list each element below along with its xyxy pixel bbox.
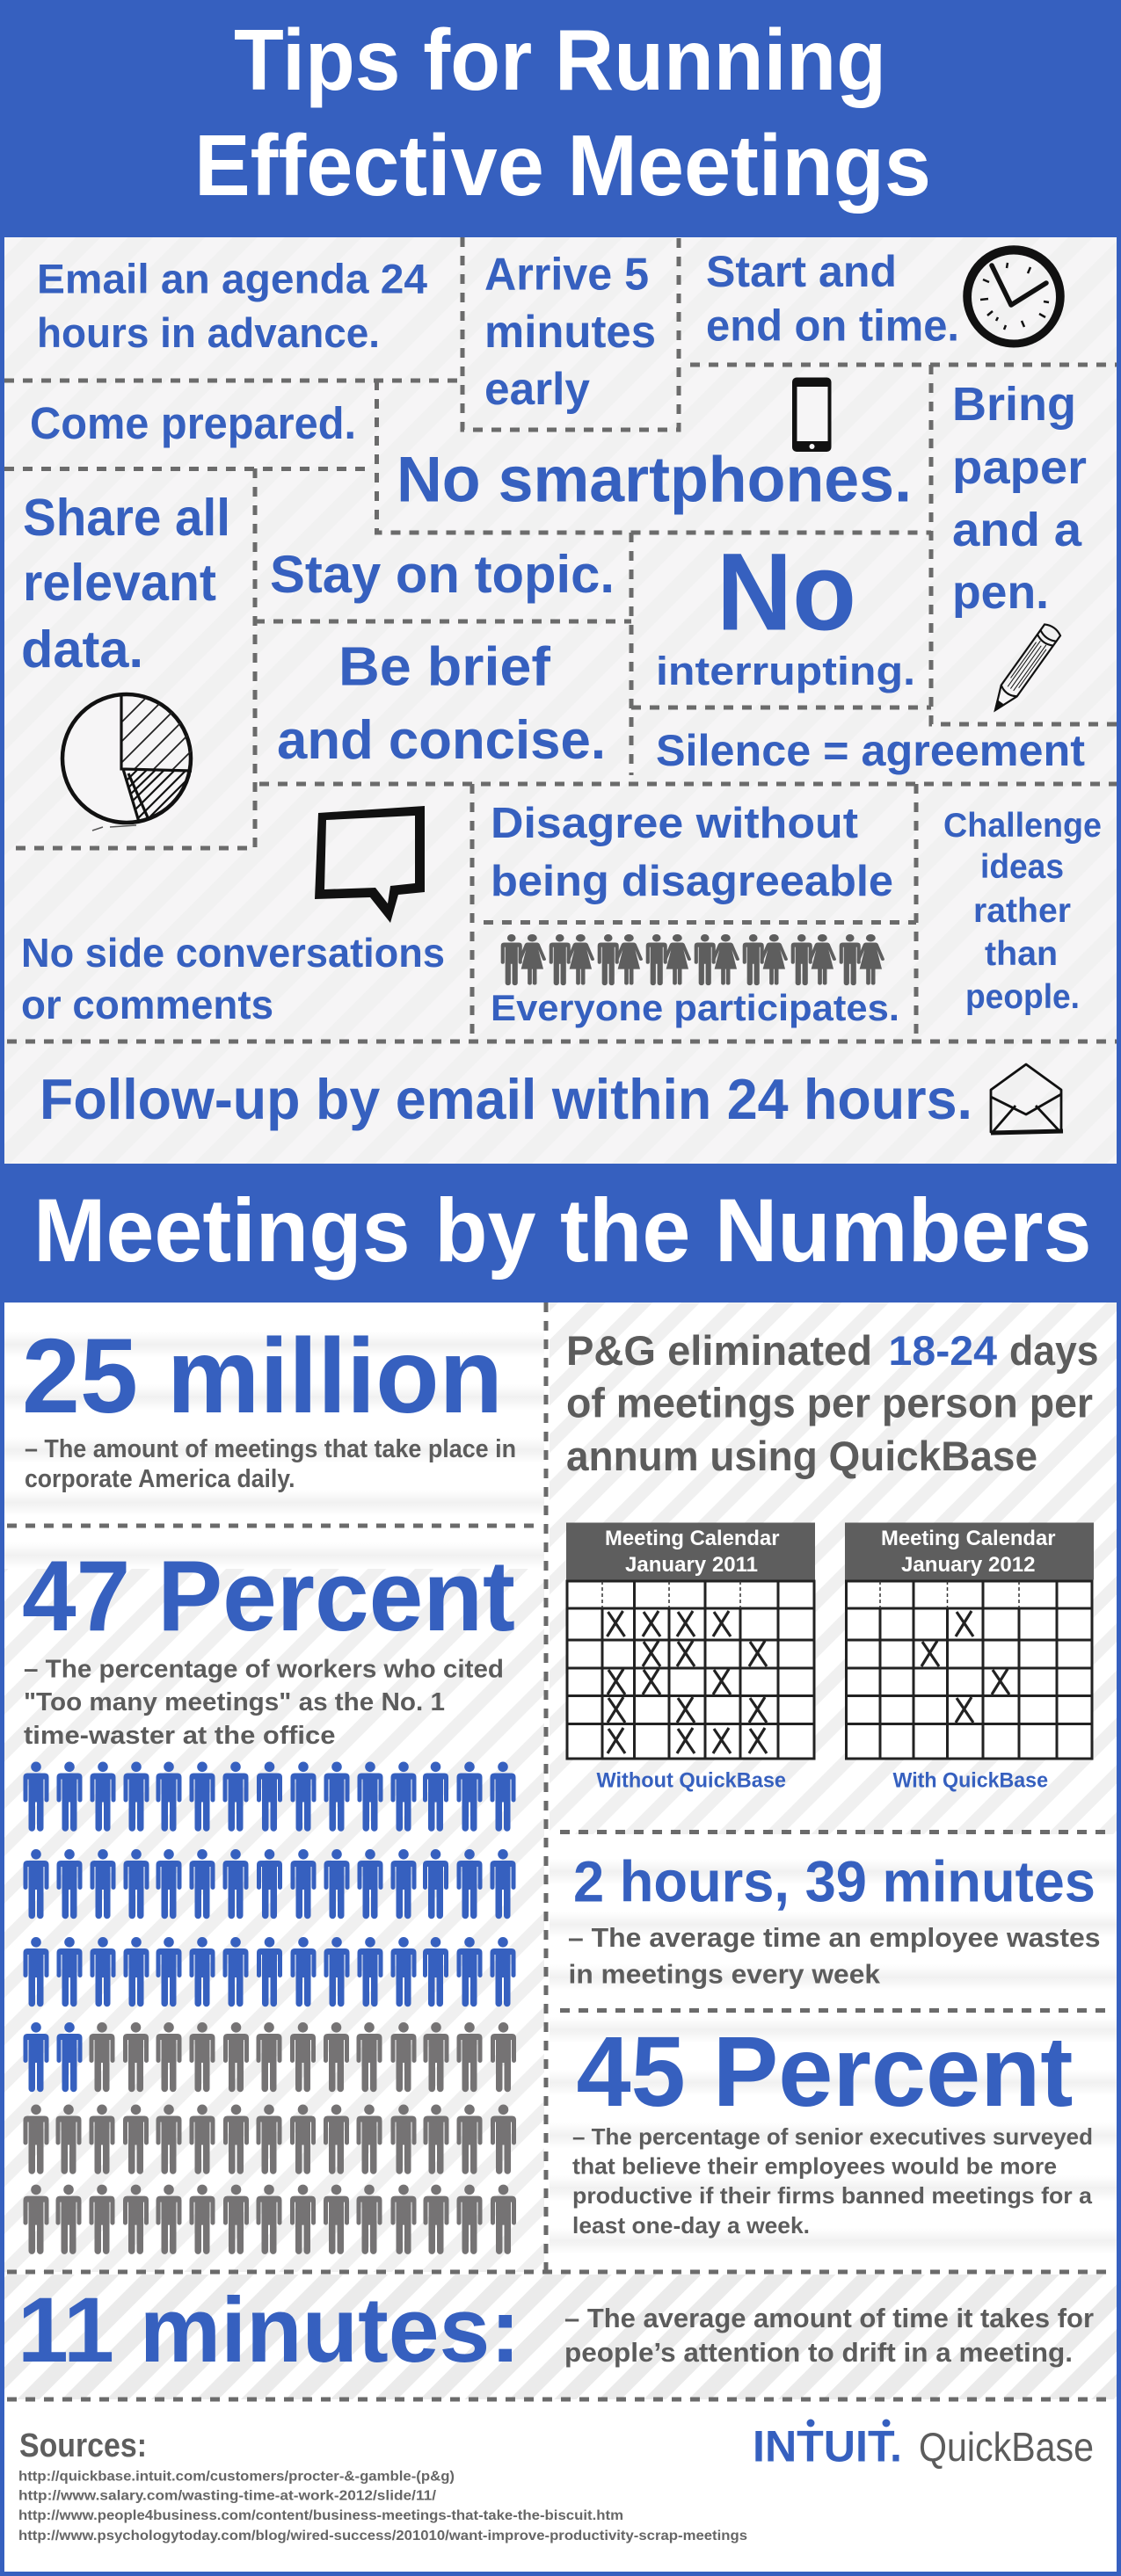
tip: share all relevant data: data. (21, 620, 143, 678)
tip: be brief and concise (277, 636, 606, 771)
tip: bring paper and a pen: Bring (952, 378, 1076, 431)
tip: challenge ideas rather than people: than (985, 935, 1058, 973)
icon: speech bubble (315, 806, 425, 923)
tip: be brief and concise: Be brief (338, 636, 550, 698)
icon: smartphone (792, 378, 832, 452)
stat: 47 percent: – The percentage of workers who cited (24, 1656, 504, 1684)
tip: share all relevant data: Share all (23, 489, 230, 547)
tip: no interrupting: interrupting. (656, 649, 915, 693)
tip: share all relevant data (21, 489, 230, 678)
calendar: January 2011 without QuickBase: Meeting Calendar (605, 1527, 779, 1550)
tip: bring paper and a pen: and a (952, 504, 1082, 556)
tip: no side conversations: No side conversations (21, 930, 445, 976)
panel: meetings by the numbers (4, 1303, 1117, 2572)
tip: arrive 5 minutes early: minutes (484, 307, 656, 358)
calendar: January 2011 without QuickBase: Without QuickBase (596, 1768, 786, 1793)
tip: follow-up by email: Follow-up by email within 24 hours. (40, 1067, 972, 1131)
stat: 2 hours 39 minutes: – The average time an employee wastes (568, 1922, 1101, 1953)
sources: Sources: (19, 2427, 147, 2464)
stat: 45 percent: productive if their firms banned meetings for a (572, 2182, 1093, 2209)
stat: 47 percent: time-waster at the office (24, 1722, 336, 1750)
heading: meetings by the numbers: Meetings by the Numbers (33, 1180, 1092, 1281)
tip: be brief and concise: and concise. (277, 710, 606, 771)
tip: stay on topic: Stay on topic. (270, 545, 615, 604)
calendar: January 2012 with QuickBase: Meeting Calendar (881, 1527, 1055, 1550)
header: tips title (194, 11, 931, 214)
sources: http://www.psychologytoday.com/blog/wired-success/201010/want-improve-productivity-scrap-meetings (18, 2529, 747, 2543)
tip: start and end on time: end on time. (706, 301, 959, 350)
tip: challenge ideas rather than people: ideas (980, 848, 1064, 886)
tip: challenge ideas rather than people: Challenge (943, 807, 1102, 845)
tip: bring paper and a pen: pen. (952, 566, 1049, 619)
text: P&G eliminated days (566, 1327, 1099, 1479)
logo: Intuit QuickBase (753, 2419, 1094, 2471)
sources: http://www.salary.com/wasting-time-at-work-2012/slide/11/ (18, 2489, 437, 2503)
text: P&G eliminated days: days (1009, 1327, 1099, 1374)
logo: Intuit QuickBase: INTUIT. (753, 2422, 902, 2471)
tip: arrive 5 minutes early: Arrive 5 (484, 250, 649, 301)
tip: no side conversations (21, 930, 445, 1027)
text: P&G eliminated days: annum using QuickBase (566, 1433, 1037, 1479)
tip: no side conversations: or comments (21, 982, 273, 1027)
tip: everyone participates: Everyone participates. (491, 987, 899, 1028)
logo: Intuit QuickBase: QuickBase (919, 2424, 1094, 2470)
header: tips title: Tips for Running (234, 11, 886, 108)
stat: 45 percent: 45 Percent (577, 2016, 1073, 2127)
tip: come prepared: Come prepared. (30, 398, 356, 448)
tip: no smartphones: No smartphones. (397, 445, 912, 515)
stat: 45 percent (572, 2016, 1093, 2239)
tip: disagree without being disagreeable: Disagree without (491, 800, 858, 847)
icon: clock (964, 246, 1064, 346)
tip: bring paper and a pen: paper (952, 441, 1087, 494)
stat: 2 hours 39 minutes (568, 1849, 1101, 1990)
calendar: January 2011 without QuickBase (566, 1522, 815, 1793)
tip: no interrupting: No (717, 531, 856, 654)
calendar: January 2012 with QuickBase (845, 1522, 1094, 1793)
calendar: January 2012 with QuickBase: January 2012 (901, 1553, 1036, 1577)
text: P&G eliminated days: of meetings per person per (566, 1380, 1093, 1426)
stat: 45 percent: least one-day a week. (572, 2212, 810, 2239)
tip: share all relevant data: relevant (23, 554, 216, 612)
tip: email an agenda: hours in advance. (37, 309, 380, 356)
stat: 47 percent: "Too many meetings" as the No. 1 (24, 1688, 445, 1716)
tip: email an agenda (37, 255, 427, 356)
calendar: January 2012 with QuickBase: With QuickBase (893, 1768, 1048, 1793)
stat: 11 minutes: – The average amount of time it takes for (564, 2303, 1094, 2333)
tip: silence equals agreement: Silence = agreement (656, 726, 1085, 775)
panel: meeting tips (4, 237, 1117, 1164)
icon: envelope (991, 1064, 1063, 1133)
tip: disagree without being disagreeable (491, 800, 893, 905)
tip: arrive 5 minutes early (484, 250, 656, 415)
icon: pie chart (60, 693, 193, 831)
tip: disagree without being disagreeable: being disagreeable (491, 858, 893, 905)
stat: 2 hours 39 minutes: 2 hours, 39 minutes (573, 1849, 1096, 1914)
sources: http://www.people4business.com/content/business-meetings-that-take-the-biscuit.htm (18, 2508, 623, 2523)
stat: 11 minutes: 11 minutes: (18, 2279, 520, 2382)
stat: 25 million: 25 million (22, 1316, 503, 1435)
chart: 47 of 90 people icons (23, 1761, 516, 2254)
tip: bring paper and a pen (952, 378, 1087, 619)
text: P&G eliminated days: P&G eliminated (566, 1327, 872, 1374)
tip: no interrupting (656, 531, 915, 693)
stat: 11 minutes: people’s attention to drift in a meeting. (564, 2337, 1073, 2368)
icon: pencil (987, 622, 1062, 715)
calendar: January 2011 without QuickBase: January 2011 (625, 1553, 758, 1577)
tip: email an agenda: Email an agenda 24 (37, 255, 427, 302)
stat: 11 minutes (18, 2279, 1094, 2382)
stat: 25 million: corporate America daily. (25, 1465, 295, 1493)
stat: 47 percent (22, 1541, 515, 1750)
stat: 45 percent: that believe their employees would be more (572, 2153, 1057, 2180)
tip: arrive 5 minutes early: early (484, 364, 590, 415)
header: tips title: Effective Meetings (194, 117, 931, 214)
sources: http://quickbase.intuit.com/customers/procter-&-gamble-(p&g) (18, 2470, 455, 2484)
tip: challenge ideas rather than people: rather (973, 892, 1071, 930)
tip: challenge ideas rather than people: people. (965, 978, 1080, 1016)
tip: start and end on time: Start and (706, 247, 897, 296)
stat: 47 percent: 47 Percent (22, 1541, 515, 1652)
stat: 2 hours 39 minutes: in meetings every week (568, 1958, 881, 1990)
text: P&G eliminated days: 18-24 (888, 1327, 997, 1374)
tip: start and end on time (706, 247, 959, 350)
sources (18, 2427, 747, 2543)
stat: 25 million: – The amount of meetings that take place in (25, 1435, 516, 1463)
icon: row of people (501, 934, 884, 985)
stat: 45 percent: – The percentage of senior executives surveyed (572, 2123, 1093, 2150)
stat: 25 million (22, 1316, 516, 1493)
tip: challenge ideas rather than people (943, 807, 1102, 1016)
